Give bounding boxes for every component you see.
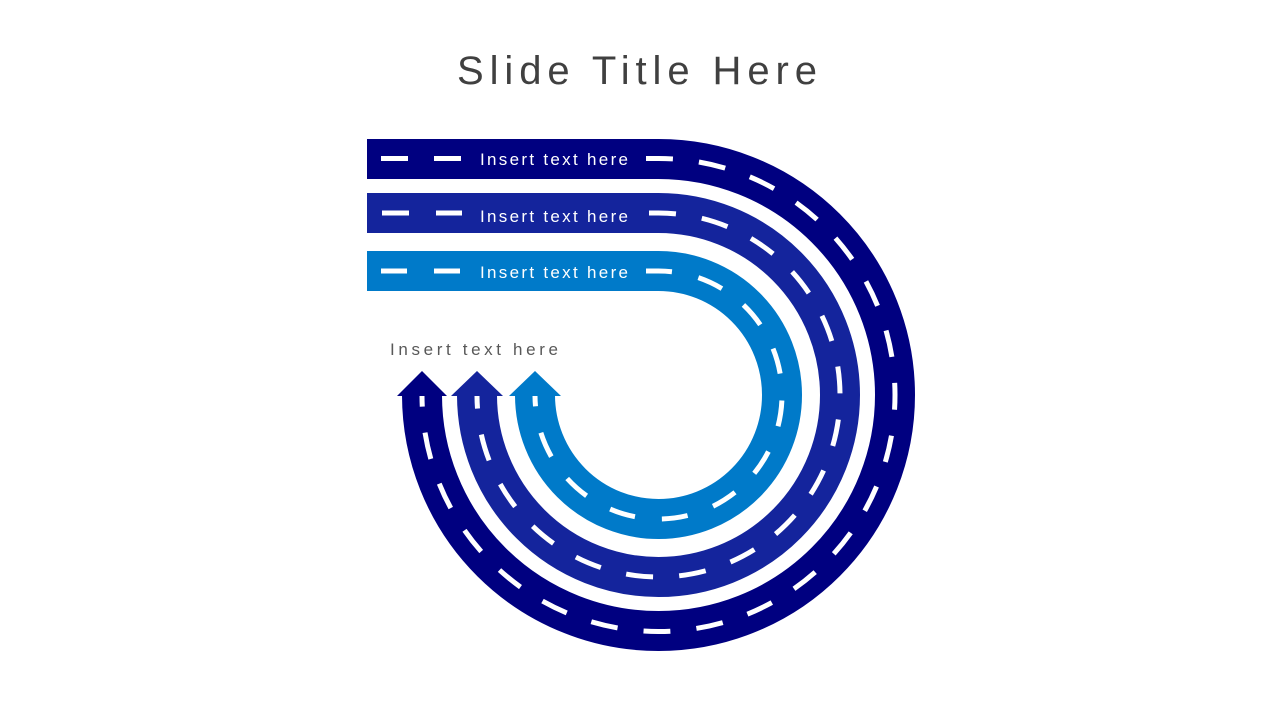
road: inner <box>367 263 782 519</box>
arrowhead: middle <box>451 371 503 396</box>
arrowhead: outer <box>397 371 447 396</box>
lane dashes: inner <box>381 271 782 519</box>
arrow label: Insert text here <box>390 340 558 359</box>
road label: inner: Insert text here <box>480 263 628 282</box>
lane dashes: outer <box>381 158 895 632</box>
road: middle <box>367 207 840 577</box>
road label: outer: Insert text here <box>480 150 628 169</box>
lane dashes: middle <box>382 213 840 577</box>
title: Slide Title Here <box>457 49 817 93</box>
road label: middle: Insert text here <box>480 207 628 226</box>
road: outer <box>367 150 895 632</box>
arrowhead: inner <box>509 371 561 396</box>
